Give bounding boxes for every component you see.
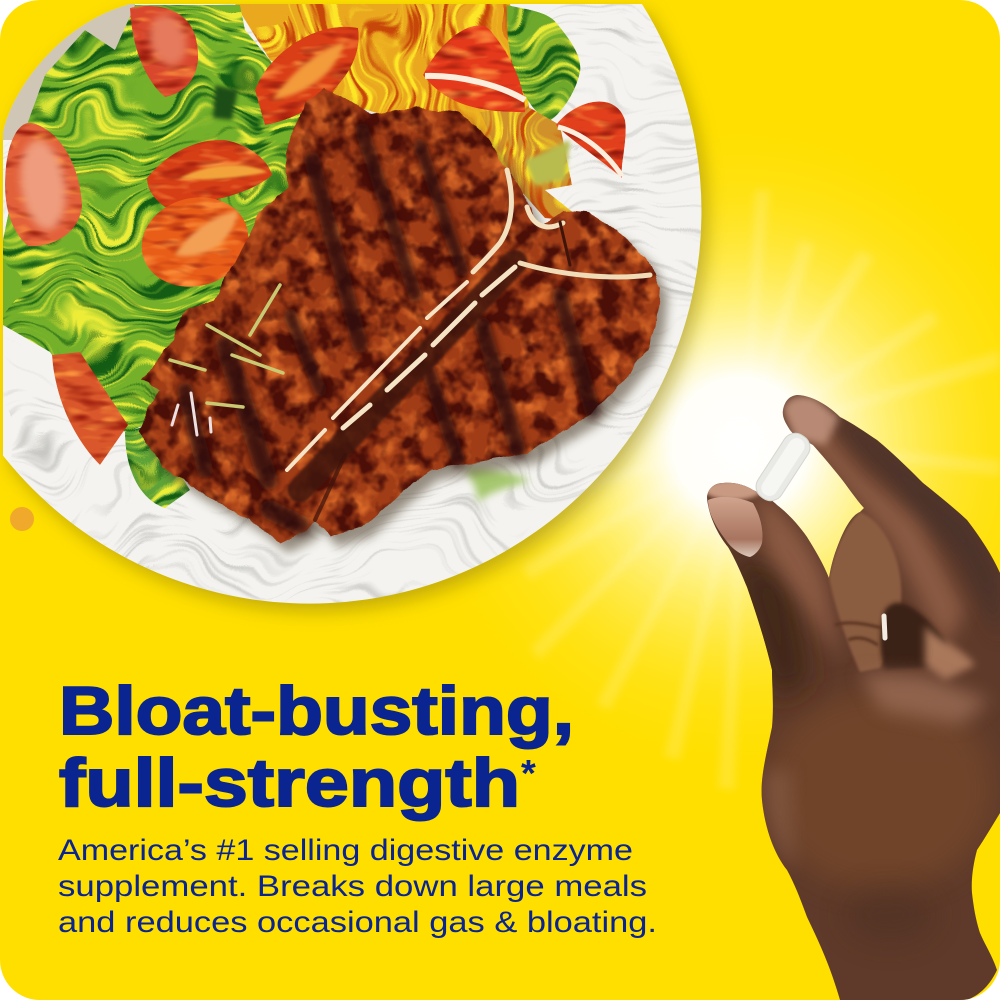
steak — [140, 88, 660, 543]
stem cluster — [480, 106, 572, 219]
hand holding capsule — [700, 390, 1000, 1000]
dark wrist mark — [860, 888, 920, 933]
tomato skin line top right — [425, 76, 525, 100]
greens at bottom of plate — [465, 469, 530, 503]
ring fold — [884, 616, 885, 638]
herb sprigs on steak — [170, 285, 283, 407]
asterisk: * — [521, 753, 536, 795]
index finger dark top — [840, 412, 1000, 640]
beige plate edge at top left — [0, 0, 135, 140]
lit wrist edge — [765, 770, 795, 870]
steak shadow — [148, 98, 668, 553]
tomato streak upper — [272, 42, 345, 100]
tomato flesh top — [144, 10, 192, 70]
heading line 2: full-strength — [59, 745, 520, 821]
plate — [0, 0, 702, 604]
wrist tone — [765, 690, 995, 890]
plate shadow — [9, 12, 707, 612]
index finger lit underside — [808, 431, 970, 642]
orange speck — [10, 507, 34, 531]
body text — [58, 834, 657, 939]
tomato skin line far right — [558, 127, 622, 176]
body line 2: supplement. Breaks down large meals — [58, 870, 647, 903]
lower palm light — [860, 672, 990, 725]
heading — [59, 673, 574, 821]
body line 3: and reduces occasional gas & bloating. — [58, 906, 657, 939]
capsule highlight — [758, 435, 808, 499]
index finger tip — [783, 396, 840, 445]
thumb lit side — [755, 490, 840, 660]
hand — [700, 390, 1000, 1000]
light burst behind capsule — [492, 161, 1000, 792]
dark leaf shadow — [213, 85, 238, 120]
thumb base dark — [730, 550, 810, 700]
finger hollow dark — [880, 603, 946, 670]
food plate — [0, 0, 702, 604]
tomato flesh left — [15, 137, 71, 233]
body line 1: America’s #1 selling digestive enzyme — [58, 834, 633, 867]
thumb tip — [707, 482, 760, 501]
pale stem — [525, 140, 570, 185]
tomato streak lower — [175, 210, 238, 256]
tomato streak mid — [180, 165, 268, 180]
curled fingers — [829, 512, 901, 672]
knuckle light — [925, 625, 975, 680]
yellow sauce behind tomato — [235, 4, 530, 175]
fat marks on steak — [172, 393, 211, 435]
tomatoes — [5, 6, 626, 465]
salad leaves — [3, 5, 580, 508]
finger crease — [835, 623, 882, 645]
thumb nail — [708, 497, 763, 557]
heading line 1: Bloat-busting, — [59, 673, 574, 749]
steak t-bone — [287, 170, 650, 520]
capsule — [751, 428, 815, 506]
steak grill marks — [185, 130, 592, 525]
